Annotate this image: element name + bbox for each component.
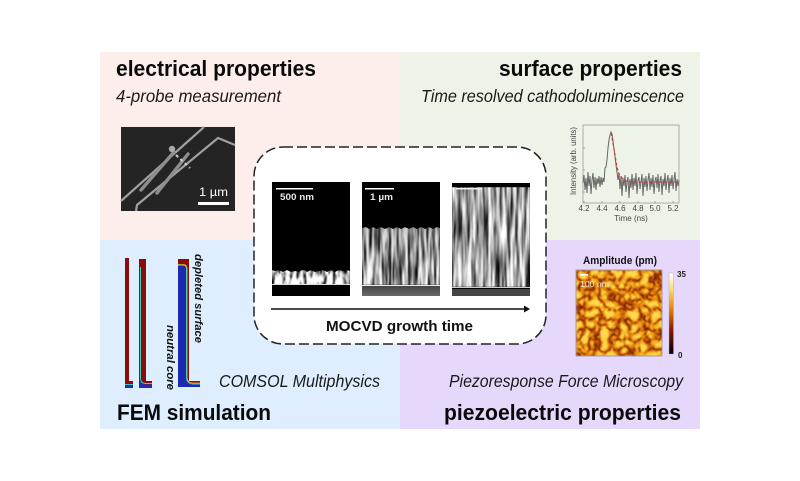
image: SEM long nanowires — [452, 183, 530, 296]
panel: MOCVD growth — [254, 147, 546, 344]
chart: cathodoluminescence decay: 4.8 — [632, 204, 644, 213]
image: SEM of contacted nanowire — [121, 127, 235, 211]
legend: colour scale: 0 — [678, 351, 683, 360]
chart title: Amplitude (pm): Amplitude (pm) — [583, 255, 657, 267]
chart: cathodoluminescence decay: 5.2 — [667, 204, 679, 213]
diagram: medium nanowire cross-section — [139, 259, 152, 388]
diagram: thin nanowire cross-section — [125, 258, 133, 388]
legend: colour scale — [669, 270, 686, 360]
legend: colour scale: 35 — [677, 270, 686, 279]
subheading: Piezoresponse Force Microscopy: Piezoresponse Force Microscopy — [449, 371, 684, 391]
chart: cathodoluminescence decay: 4.6 — [614, 204, 626, 213]
label: neutral core: neutral core — [164, 325, 176, 390]
image: SEM of contacted nanowire: 1 µm — [199, 185, 228, 199]
panel: piezoelectric properties — [400, 240, 700, 429]
subheading: Time resolved cathodoluminescence: Time resolved cathodoluminescence — [421, 86, 684, 106]
heading: electrical properties: electrical properties — [116, 56, 316, 81]
chart: cathodoluminescence decay: Intensity (arb. units) — [569, 127, 578, 195]
image: SEM short nanowires: 500 nm — [280, 192, 314, 203]
panel: electrical properties — [100, 52, 400, 240]
diagram: thick nanowire cross-section — [178, 259, 200, 387]
chart: cathodoluminescence decay: 4.2 — [578, 204, 590, 213]
chart: cathodoluminescence decay: 4.4 — [596, 204, 608, 213]
label: depleted surface: depleted surface — [192, 254, 204, 343]
chart: cathodoluminescence decay — [569, 125, 679, 223]
image: SEM medium nanowires — [362, 182, 440, 296]
label: MOCVD growth time: MOCVD growth time — [326, 318, 473, 335]
image: AFM amplitude map — [576, 270, 662, 356]
image: SEM medium nanowires: 1 µm — [370, 192, 393, 203]
heading: surface properties: surface properties — [499, 56, 682, 81]
heading: FEM simulation: FEM simulation — [117, 400, 271, 425]
panel: surface properties — [400, 52, 700, 240]
subheading: 4-probe measurement: 4-probe measurement — [116, 86, 282, 106]
heading: piezoelectric properties: piezoelectric properties — [444, 400, 681, 425]
image: SEM short nanowires — [272, 182, 350, 296]
arrow: growth time — [271, 306, 530, 312]
image: AFM amplitude map: 100 nm — [580, 280, 609, 289]
panel: FEM simulation — [100, 240, 400, 429]
subheading: COMSOL Multiphysics: COMSOL Multiphysics — [219, 371, 380, 391]
chart: cathodoluminescence decay: 5.0 — [649, 204, 661, 213]
chart: cathodoluminescence decay: Time (ns) — [614, 214, 648, 223]
